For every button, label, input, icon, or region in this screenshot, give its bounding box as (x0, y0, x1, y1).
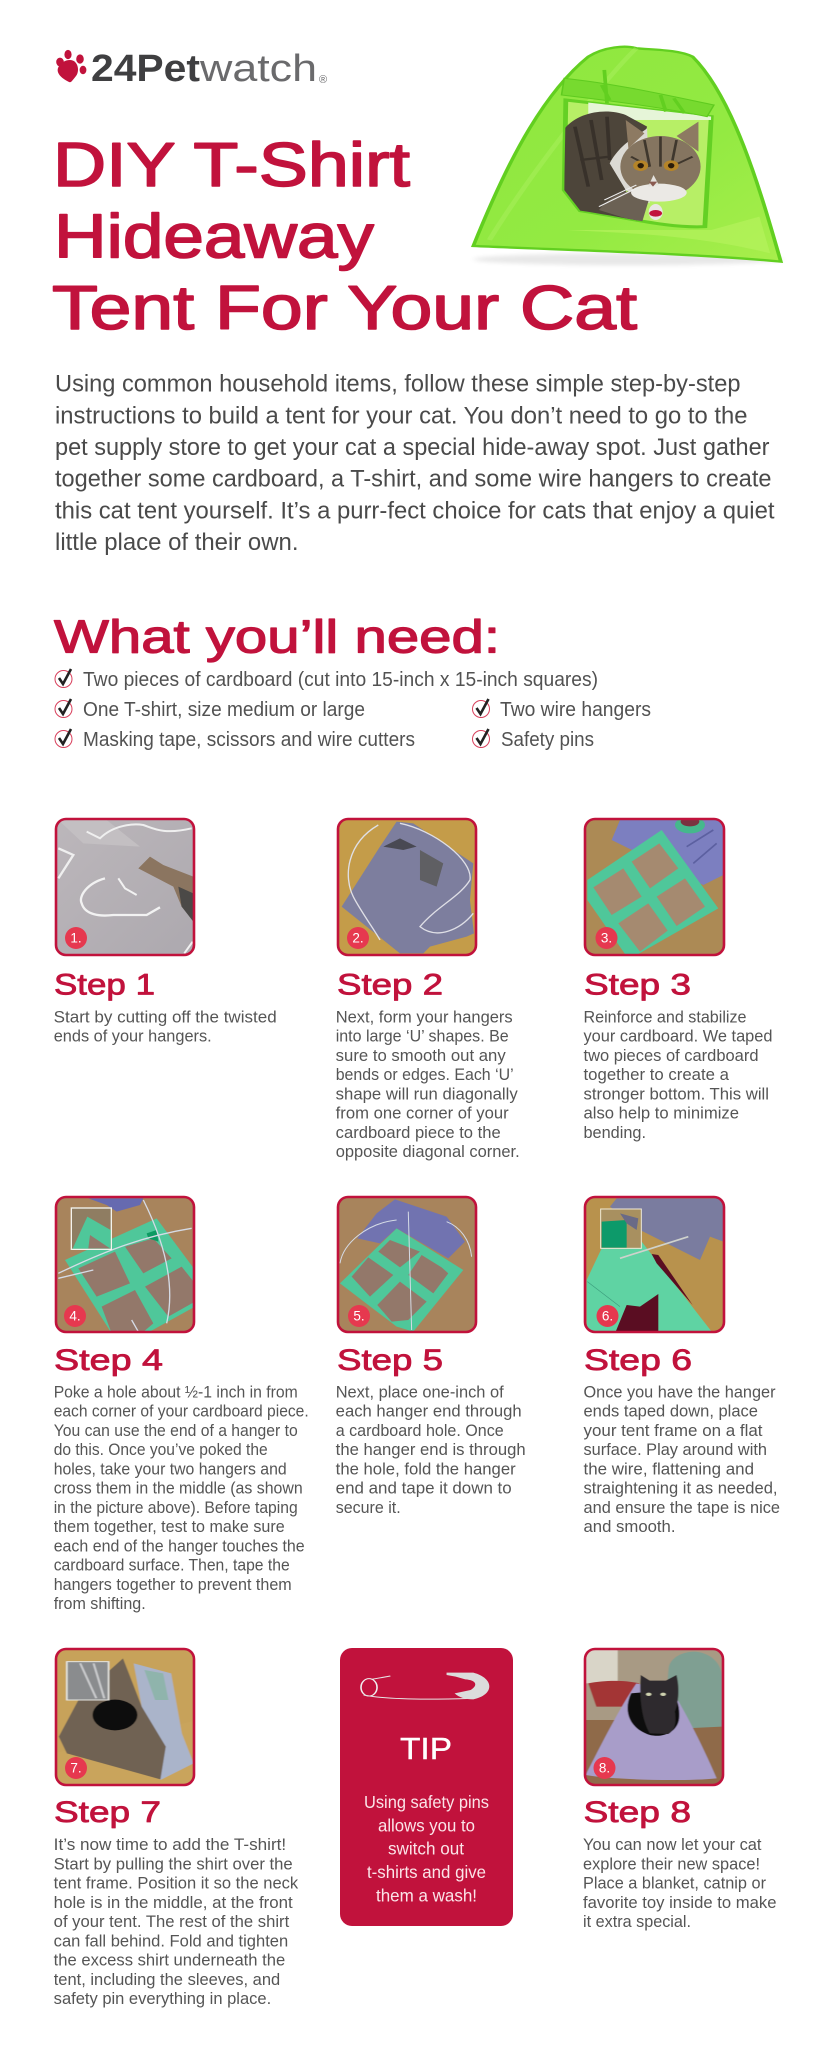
heading: Step 5 (337, 1344, 443, 1377)
text block (336, 1008, 520, 1161)
number badge: 4. (69, 1308, 81, 1324)
tip heading: TIP (400, 1731, 452, 1766)
title: Tent For Your Cat (52, 274, 637, 343)
panel: step 6 (583, 1193, 780, 1536)
photo: T-shirt over tent frame (53, 1647, 198, 1790)
tip text: them a wash! (376, 1885, 477, 1905)
intro text block: together some cardboard, a T-shirt, and some wire hangers to create (55, 466, 772, 493)
text block (584, 1008, 772, 1142)
text block: ends of your hangers. (54, 1028, 212, 1046)
text block: opposite diagonal corner. (336, 1143, 520, 1161)
text block: the hole, fold the hanger (336, 1460, 516, 1478)
number badge: 5. (353, 1308, 365, 1324)
text block: Poke a hole about ½-1 inch in from (54, 1383, 298, 1401)
number badge (347, 927, 369, 949)
text block: end and tape it down to (336, 1480, 512, 1498)
photo: cat in finished tent (580, 1647, 730, 1790)
tip text: allows you to (378, 1815, 475, 1835)
text block: hole is in the middle, at the front (54, 1894, 293, 1912)
number badge (65, 1757, 87, 1779)
heading: Step 7 (54, 1796, 161, 1829)
text block: ends taped down, place (584, 1402, 758, 1420)
checklist items (83, 669, 651, 751)
text block: cross them in the middle (as shown (54, 1480, 303, 1498)
callout: tip (340, 1648, 513, 1926)
heading: Step 3 (584, 968, 691, 1001)
image: green tent with cat (473, 47, 783, 265)
text block: into large ‘U’ shapes. Be (336, 1028, 509, 1046)
text block: Place a blanket, catnip or (583, 1874, 766, 1892)
text block: Next, form your hangers (336, 1008, 513, 1026)
text block: tent, including the sleeves, and (54, 1971, 280, 1989)
text block: the hanger end is through (336, 1441, 526, 1459)
text block: together to create a (584, 1066, 730, 1084)
text block (54, 1836, 299, 2008)
panel: step 2 (333, 817, 520, 1161)
panel: step 7 (53, 1647, 299, 2008)
text block: the excess shirt underneath the (54, 1952, 285, 1970)
intro text block: instructions to build a tent for your cat. You don’t need to go to the (55, 402, 748, 429)
text block (583, 1836, 776, 1931)
brand name: 24Pet (91, 48, 200, 90)
checklist items: Safety pins (501, 729, 594, 751)
title: Hideaway (54, 202, 374, 272)
text block: cardboard piece to the (336, 1124, 501, 1142)
text block: it extra special. (583, 1913, 691, 1931)
text block: cardboard surface. Then, tape the (54, 1556, 290, 1574)
number badge (596, 927, 618, 949)
text block: Start by pulling the shirt over the (54, 1855, 293, 1873)
text block: stronger bottom. This will (584, 1085, 769, 1103)
brand name: ® (319, 74, 327, 86)
text block: and smooth. (584, 1518, 676, 1536)
text block: secure it. (336, 1499, 401, 1517)
text block: holes, take your two hangers and (54, 1460, 287, 1478)
photo: taped cardboard (583, 817, 727, 960)
text block (54, 1383, 309, 1613)
text block: tent frame. Position it so the neck (54, 1874, 299, 1892)
text block: Reinforce and stabilize (584, 1008, 746, 1026)
intro text block: Using common household items, follow these simple step-by-step (55, 371, 740, 398)
text block: You can now let your cat (583, 1836, 762, 1854)
text block: them together, test to make sure (54, 1518, 285, 1536)
text block: straightening it as needed, (584, 1480, 778, 1498)
title (52, 131, 637, 343)
text block: favorite toy inside to make (583, 1894, 776, 1912)
icon: safety pin (361, 1673, 489, 1699)
text block: your cardboard. We taped (584, 1028, 772, 1046)
number badge: 2. (352, 930, 364, 946)
title: DIY T-Shirt (53, 131, 410, 200)
text block: You can use the end of a hanger to (54, 1422, 298, 1440)
text block: from shifting. (54, 1595, 146, 1613)
icon: check circles (55, 669, 490, 748)
text block: a cardboard hole. Once (336, 1422, 504, 1440)
text block: also help to minimize (584, 1104, 739, 1122)
text block: safety pin everything in place. (54, 1990, 271, 2008)
text block: Once you have the hanger (584, 1383, 776, 1401)
text block: and ensure the tape is nice (584, 1499, 780, 1517)
checklist items: One T-shirt, size medium or large (83, 699, 365, 721)
panel: step 4 (53, 1193, 309, 1613)
text block: can fall behind. Fold and tighten (54, 1932, 288, 1950)
tip text: Using safety pins (364, 1792, 489, 1812)
text block: the wire, flattening and (584, 1460, 754, 1478)
photo: tent frame on flat surface (583, 1193, 727, 1337)
text block: of your tent. The rest of the shirt (54, 1913, 290, 1931)
photo: hangers on shirt (333, 817, 480, 960)
text block: Next, place one-inch of (336, 1383, 504, 1401)
text block: Start by cutting off the twisted (54, 1008, 277, 1026)
panel: step 1 (53, 817, 277, 1046)
text block: It’s now time to add the T-shirt! (54, 1836, 286, 1854)
number badge (64, 1305, 86, 1327)
panel: step 5 (333, 1193, 526, 1517)
icon: paw (56, 50, 86, 82)
number badge (594, 1757, 616, 1779)
text block: each corner of your cardboard piece. (54, 1402, 309, 1420)
intro text block: pet supply store to get your cat a special hide-away spot. Just gather (55, 434, 770, 461)
heading: Step 4 (54, 1344, 163, 1377)
heading: what you'll need: What you’ll need: (54, 610, 500, 662)
intro text block: this cat tent yourself. It’s a purr-fect choice for cats that enjoy a quiet (55, 497, 775, 524)
photo: board with hanger ends taped (333, 1193, 480, 1337)
text block (54, 1008, 277, 1046)
text block: bending. (584, 1124, 646, 1142)
heading: Step 6 (584, 1344, 692, 1377)
tip text: t-shirts and give (367, 1862, 486, 1882)
number badge: 7. (70, 1760, 82, 1776)
checklist (55, 669, 651, 751)
text block: two pieces of cardboard (584, 1047, 758, 1065)
panel: step 3 (583, 817, 772, 1142)
heading: Step 2 (337, 968, 443, 1001)
brand name: watch (199, 48, 317, 90)
heading: Step 8 (584, 1796, 691, 1829)
number badge (348, 1305, 370, 1327)
number badge: 6. (602, 1308, 613, 1324)
text block: your tent frame on a flat (584, 1422, 763, 1440)
text block: in the picture above). Before taping (54, 1499, 298, 1517)
text block: each hanger end through (336, 1402, 522, 1420)
logo: 24Petwatch (56, 48, 327, 90)
text block (584, 1383, 780, 1536)
text block (336, 1383, 526, 1517)
number badge: 1. (70, 930, 82, 946)
text block: from one corner of your (336, 1104, 509, 1122)
text block: hangers together to prevent them (54, 1576, 292, 1594)
photo: crossed hangers (53, 1193, 200, 1337)
text block: do this. Once you’ve poked the (54, 1441, 268, 1459)
text block: bends or edges. Each ‘U’ (336, 1066, 514, 1084)
heading: Step 1 (54, 968, 155, 1001)
photo: pliers and cut hanger (53, 817, 200, 960)
intro text block (55, 371, 775, 556)
panel: step 8 (580, 1647, 776, 1931)
brand name (91, 48, 327, 90)
text block: each end of the hanger touches the (54, 1537, 305, 1555)
number badge: 3. (601, 930, 612, 946)
text block: sure to smooth out any (336, 1047, 506, 1065)
text block: surface. Play around with (584, 1441, 767, 1459)
tip text (364, 1792, 489, 1905)
number badge (596, 1305, 618, 1327)
checklist items: Two wire hangers (500, 699, 651, 721)
intro text block: little place of their own. (55, 529, 298, 556)
checklist items: Masking tape, scissors and wire cutters (83, 729, 415, 751)
text block: shape will run diagonally (336, 1085, 518, 1103)
checklist items: Two pieces of cardboard (cut into 15-inch x 15-inch squares) (83, 669, 598, 691)
number badge (65, 927, 87, 949)
tip text: switch out (388, 1839, 464, 1859)
number badge: 8. (599, 1760, 610, 1776)
text block: explore their new space! (583, 1855, 760, 1873)
